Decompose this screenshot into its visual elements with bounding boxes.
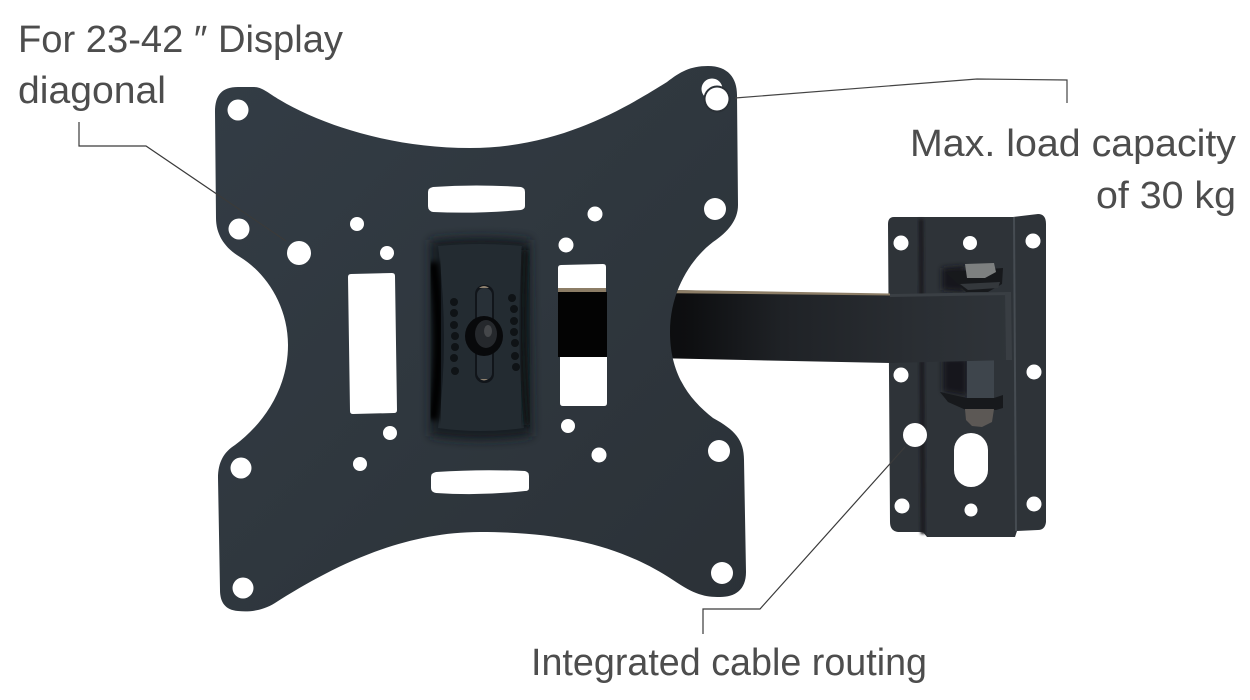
TV plate <box>215 66 746 611</box>
leader line: cable routing <box>703 447 905 634</box>
swing arm <box>555 288 1012 363</box>
centre pocket <box>430 237 532 440</box>
callout: display diagonal: diagonal <box>18 70 166 112</box>
slot and bolt <box>475 285 494 383</box>
callout: load capacity: Max. load capacity <box>910 123 1236 165</box>
callout: cable routing: Integrated cable routing <box>531 642 927 684</box>
upper pivot bolt <box>942 263 1003 292</box>
leader line: display diagonal <box>79 122 286 241</box>
callout: load capacity: of 30 kg <box>1096 175 1236 217</box>
wall bracket <box>888 214 1046 537</box>
leader line: load capacity <box>735 79 1067 103</box>
lower pivot bolt <box>940 358 1003 427</box>
window arm detail <box>558 292 607 357</box>
plate holes <box>228 78 733 598</box>
bracket holes <box>894 234 1042 516</box>
callout: display diagonal: For 23-42 ″ Display <box>18 19 343 61</box>
adjustment dots <box>450 294 520 375</box>
